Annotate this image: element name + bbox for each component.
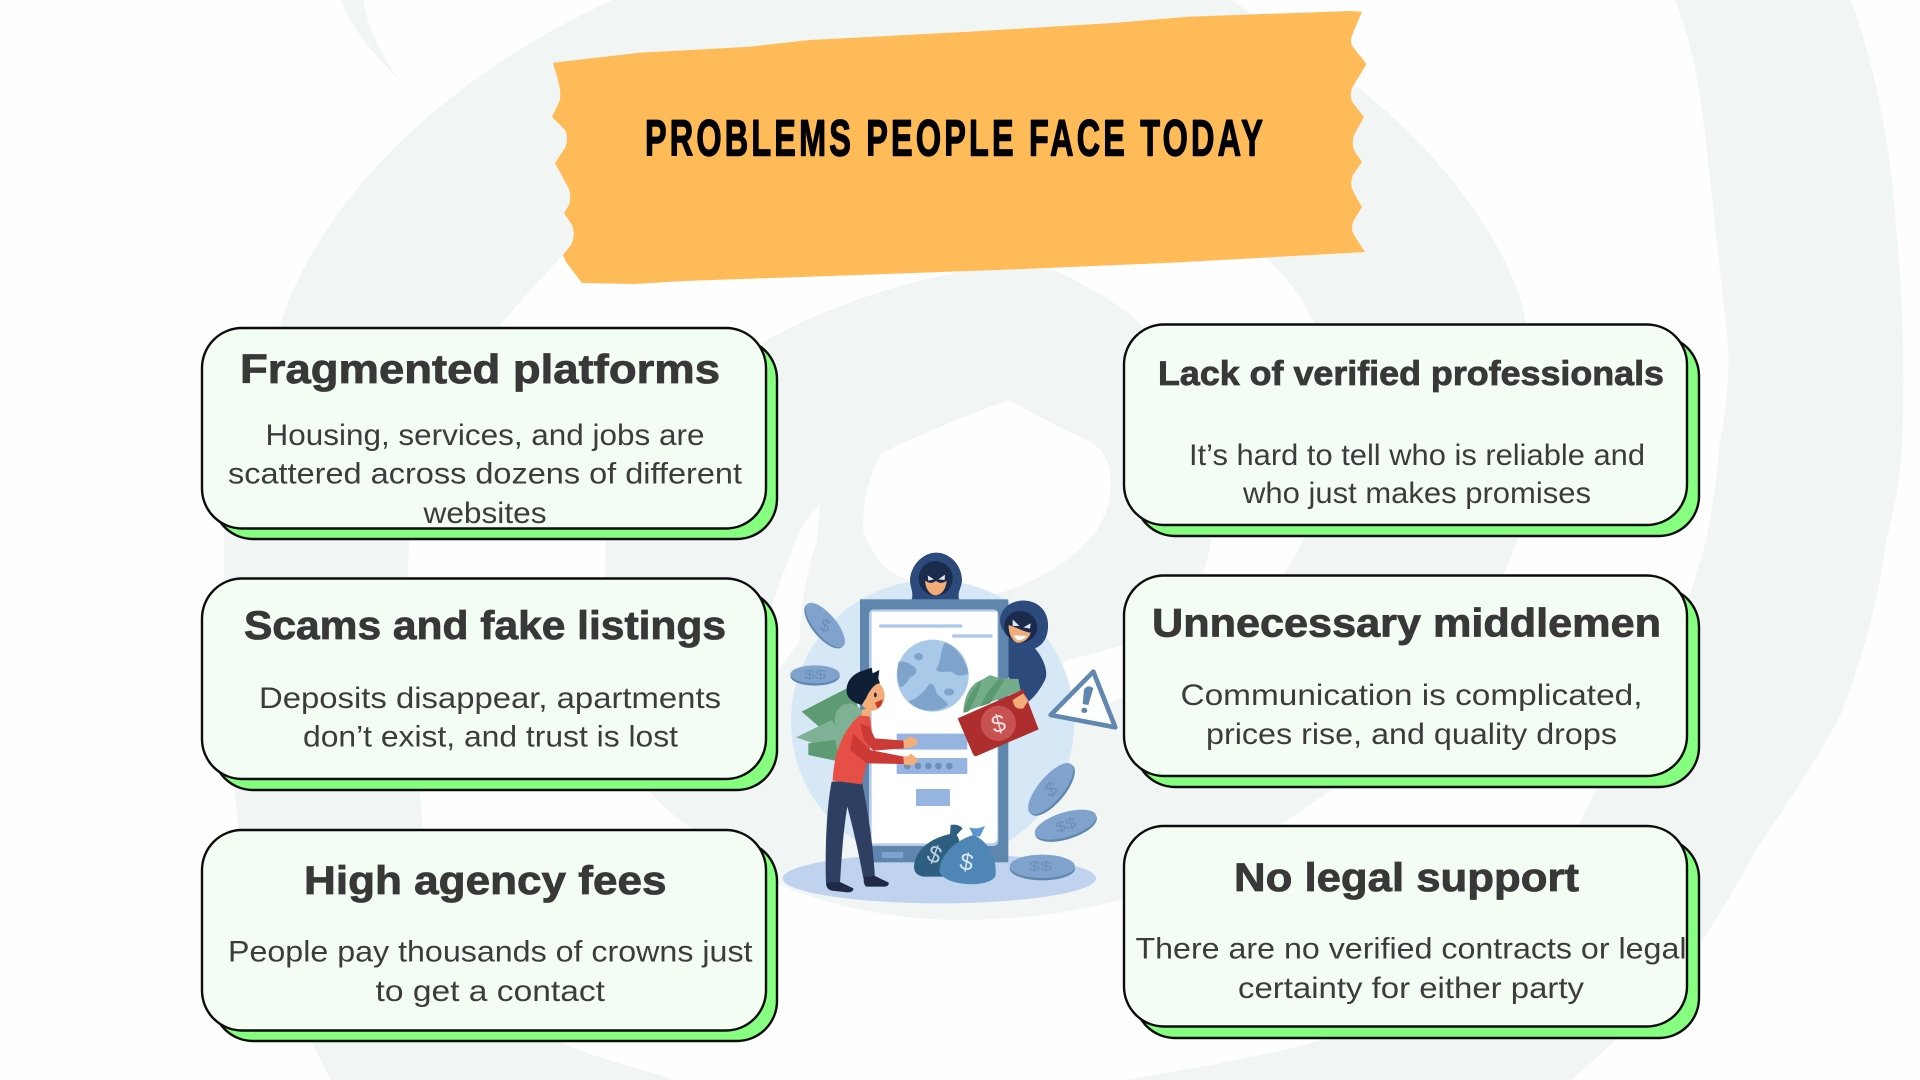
coins: [790, 597, 1100, 880]
coins: $: [1043, 778, 1060, 802]
body text: [1180, 679, 1642, 751]
coins: $$: [1029, 859, 1053, 874]
body text: [228, 419, 743, 530]
heading: Lack of verified professionals: [1158, 355, 1664, 393]
money bags: [914, 825, 996, 884]
heading: Unnecessary middlemen: [1152, 602, 1661, 646]
title banner: [552, 11, 1366, 284]
wallet with cash: [958, 675, 1039, 756]
card: Unnecessary middlemen: [1124, 576, 1699, 787]
body text: Communication is complicated,: [1180, 679, 1642, 712]
body text: Deposits disappear, apartments: [259, 682, 721, 715]
heading: No legal support: [1234, 856, 1579, 900]
body text: Housing, services, and jobs are: [266, 419, 704, 452]
heading: High agency fees: [304, 859, 666, 903]
warning triangle: [1051, 672, 1115, 727]
body text: don’t exist, and trust is lost: [303, 720, 679, 754]
heading: Scams and fake listings: [244, 604, 726, 648]
card: Lack of verified professionals: [1124, 324, 1699, 536]
body text: [228, 936, 753, 1008]
body text: prices rise, and quality drops: [1206, 718, 1617, 751]
body text: It’s hard to tell who is reliable and: [1189, 439, 1645, 472]
hooded scammer: top: [910, 553, 962, 599]
light blue circle: [791, 580, 1074, 863]
money bags: $: [923, 840, 945, 870]
coins: $$: [804, 667, 827, 682]
body text: certainty for either party: [1238, 972, 1584, 1005]
card: No legal support: [1124, 826, 1699, 1038]
card: High agency fees: [202, 830, 777, 1041]
body text: People pay thousands of crowns just: [228, 936, 753, 968]
body text: websites: [422, 497, 546, 530]
card: Scams and fake listings: [202, 578, 777, 790]
body text: [1136, 932, 1686, 1005]
hooded scammer: right: [1000, 600, 1048, 702]
body text: who just makes promises: [1242, 477, 1591, 510]
money bags: $: [958, 848, 975, 877]
man: [796, 668, 919, 892]
title text: PROBLEMS PEOPLE FACE TODAY: [645, 110, 1266, 166]
phone: [860, 599, 1008, 862]
body text: to get a contact: [376, 975, 606, 1008]
body text: [259, 682, 721, 754]
coins: $: [817, 614, 833, 637]
coins: $$: [1053, 815, 1078, 837]
body text: [1189, 439, 1645, 510]
card: Fragmented platforms: [202, 328, 777, 539]
heading: Fragmented platforms: [240, 346, 720, 392]
body text: There are no verified contracts or legal: [1136, 932, 1686, 966]
ground ellipse: [783, 853, 1096, 903]
body text: scattered across dozens of different: [228, 458, 743, 490]
illustration: scam phone scene: [783, 553, 1115, 903]
globe: [897, 640, 969, 712]
wallet with cash: $: [989, 710, 1009, 739]
